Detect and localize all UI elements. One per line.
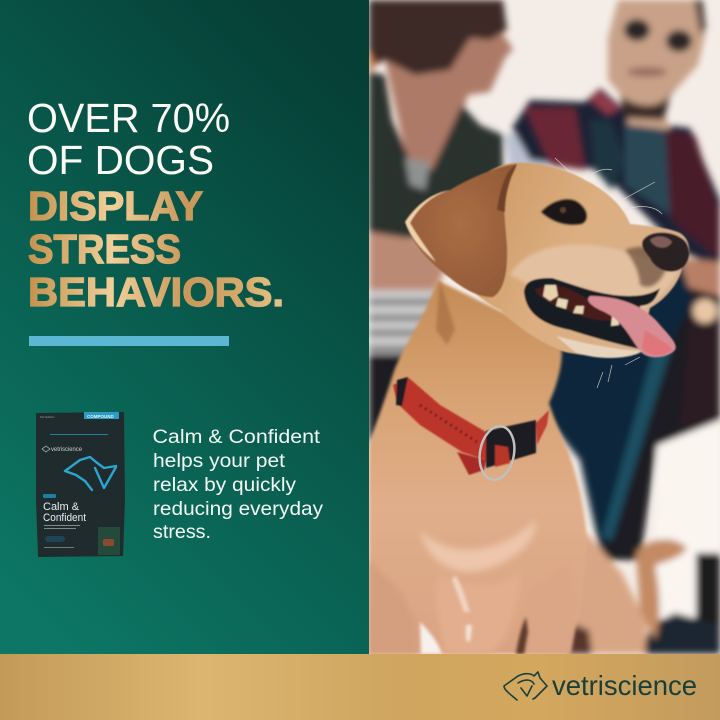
dog: red collar [393,377,549,475]
woman: hair [369,0,507,75]
headline: gold lines: DISPLAY [28,183,203,229]
collar: flap [457,452,486,475]
man: arm [680,258,720,300]
body text: stress. [153,521,211,543]
panel: green background [0,0,369,654]
woman: jacket [369,72,503,240]
dog: eye [541,199,587,225]
man: plaid shirt [512,88,720,270]
body text: relax by quickly [153,474,296,496]
product pouch: COMPOUND [87,414,114,419]
dog: lower lip fur [556,336,642,358]
second person's hand [636,539,687,640]
dog: body and neck [369,280,587,654]
right-hand dark area [600,280,720,560]
woman: dark trousers [369,349,404,446]
collar: black slider [396,377,408,406]
logo icon [504,672,547,700]
dog: blurred hind leg [570,530,647,654]
dark patch and boots [696,553,720,630]
man: sunglasses [624,19,650,41]
woman: neck and face [382,30,516,173]
dog: head [405,163,689,358]
dog: teeth [543,285,558,301]
headline: white lines: OF DOGS [27,137,214,183]
product pouch [36,412,125,557]
logo wordmark: vetriscience [552,670,697,701]
dog: ear [405,164,517,297]
headline: gold lines [28,183,284,315]
dog: whiskers [555,158,662,388]
headline: gold lines: BEHAVIORS. [28,269,284,315]
product pouch: Confident [43,512,86,524]
blue divider bar [29,336,229,346]
collar: right strap [536,410,549,445]
man: face and neck [608,0,705,130]
headline: white lines [27,95,230,183]
photo: dog with two people [369,0,720,654]
pouch dog-head graphic [65,457,116,490]
blurred people and surroundings [369,0,720,654]
product pouch: Pet Nutrition [40,415,55,419]
dog: fur creases and white tufts [420,280,528,654]
dog [369,158,689,654]
headline: white lines: OVER 70% [27,95,230,141]
body text: Calm & Confident [152,426,321,448]
headline [27,95,284,315]
man: beard/mouth [627,67,667,77]
collar: red strap [393,378,486,460]
footer band [0,654,720,720]
body text: reducing everyday [153,498,323,520]
dog: chest shading [369,520,575,654]
bright window [655,420,720,617]
man: jeans [540,262,693,550]
dog: nose [642,232,689,272]
dog: metal ring [476,423,518,483]
woman: arm [369,232,445,292]
collar: stitching [420,405,480,444]
dog: mouth [524,278,660,349]
man: light sleeve [505,132,550,170]
body text [152,426,323,543]
photo background: sky [369,0,720,654]
headline: gold lines: STRESS [28,226,181,272]
dog: tongue [588,296,676,357]
body text: helps your pet [153,450,286,472]
woman: striped shirt [369,290,437,356]
product pouch: vetriscience [51,447,83,453]
collar: black buckle [486,420,536,468]
logo: vetriscience [504,670,697,701]
product pouch: Calm & [43,501,80,513]
